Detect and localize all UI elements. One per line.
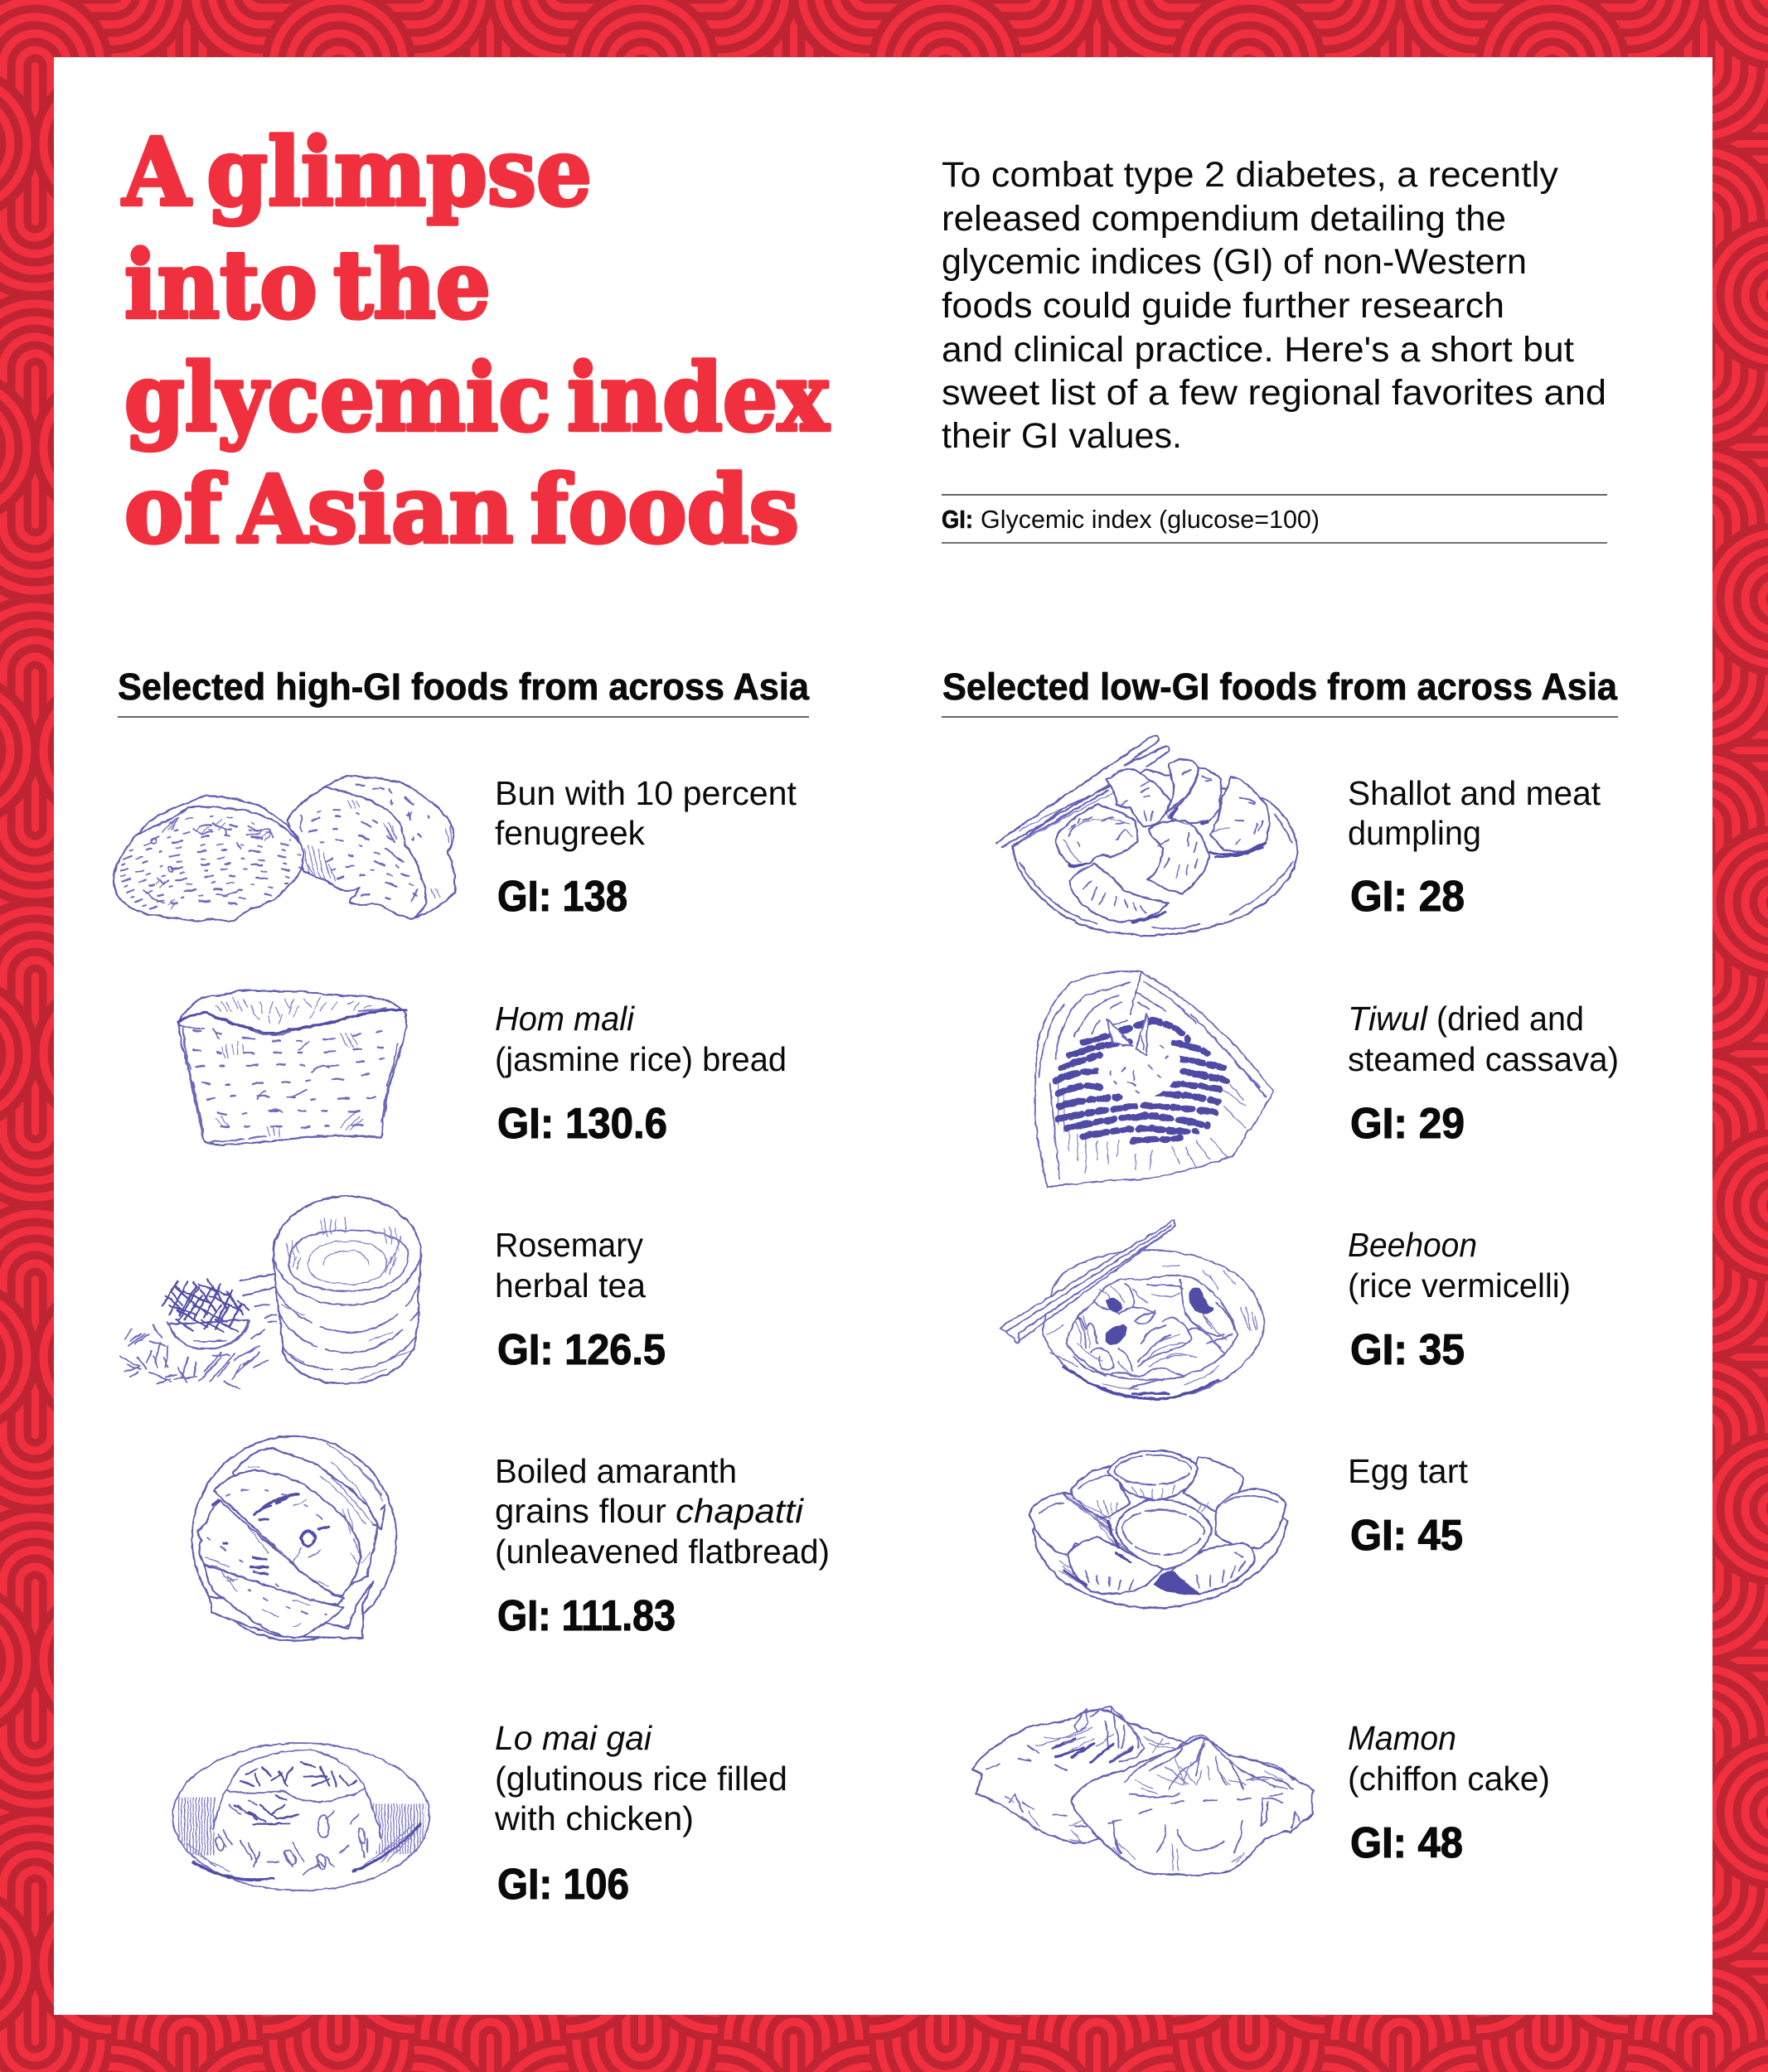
intro paragraph bbox=[942, 155, 1606, 456]
label bbox=[1348, 774, 1601, 921]
label: herbal tea bbox=[495, 1266, 646, 1305]
label bbox=[495, 1226, 666, 1374]
label bbox=[1348, 1452, 1469, 1560]
intro paragraph: and clinical practice. Here's a short but bbox=[942, 330, 1574, 370]
label: GI: 106 bbox=[497, 1861, 629, 1909]
label: fenugreek bbox=[495, 814, 645, 852]
intro paragraph: their GI values. bbox=[942, 416, 1182, 456]
intro paragraph: glycemic indices (GI) of non-Western bbox=[942, 242, 1527, 282]
label: with chicken) bbox=[494, 1799, 694, 1837]
label bbox=[495, 1000, 787, 1148]
label: (chiffon cake) bbox=[1348, 1760, 1550, 1798]
label: Tiwul bbox=[1348, 1000, 1429, 1038]
label: GI: 29 bbox=[1350, 1100, 1465, 1148]
food: beehoon bbox=[1000, 1220, 1571, 1399]
label: GI: 111.83 bbox=[497, 1592, 676, 1640]
label: Beehoon bbox=[1348, 1226, 1477, 1264]
label: Egg tart bbox=[1348, 1452, 1469, 1490]
food: tiwul bbox=[1034, 971, 1619, 1187]
label bbox=[495, 1452, 830, 1640]
label: (glutinous rice filled bbox=[495, 1760, 787, 1798]
label: (dried and bbox=[1436, 1000, 1584, 1038]
label: (jasmine rice) bread bbox=[495, 1040, 787, 1078]
label: GI: 138 bbox=[497, 873, 627, 921]
label: GI: 48 bbox=[1350, 1819, 1463, 1867]
icon: chiffon cakes bbox=[972, 1707, 1314, 1875]
glycemic index note bbox=[942, 495, 1607, 543]
label: dumpling bbox=[1348, 814, 1481, 852]
label: chapatti bbox=[676, 1492, 805, 1530]
label: Bun with 10 percent bbox=[495, 774, 797, 812]
label bbox=[1348, 1226, 1571, 1374]
label: steamed cassava) bbox=[1348, 1040, 1619, 1078]
icon: plate of glutinous rice bbox=[172, 1743, 429, 1890]
intro paragraph: sweet list of a few regional favorites and bbox=[942, 373, 1606, 413]
label: grains flour bbox=[495, 1492, 666, 1530]
glycemic index note: GI: bbox=[942, 505, 973, 534]
icon: plate of chapatti bbox=[192, 1436, 396, 1641]
label: GI: 35 bbox=[1350, 1326, 1465, 1374]
icon: plate of dumplings with chopsticks bbox=[996, 736, 1297, 936]
food: rosemary herbal tea bbox=[120, 1196, 666, 1388]
label: Rosemary bbox=[495, 1226, 643, 1264]
icon: bowl of rice vermicelli with chopsticks bbox=[1000, 1220, 1264, 1399]
title bbox=[122, 119, 830, 564]
label: GI: 126.5 bbox=[497, 1326, 666, 1374]
food: shallot and meat dumpling bbox=[996, 736, 1601, 936]
label: Boiled amaranth bbox=[495, 1452, 737, 1490]
icon: loaf of bread bbox=[178, 990, 406, 1145]
label bbox=[1348, 1000, 1619, 1148]
label bbox=[494, 1719, 787, 1909]
title: into the bbox=[124, 231, 491, 340]
label: Lo mai gai bbox=[495, 1719, 653, 1757]
heading: high-GI foods: Selected high-GI foods from across Asia bbox=[118, 666, 810, 708]
heading: low-GI foods: Selected low-GI foods from across Asia bbox=[942, 666, 1618, 708]
food: egg tart bbox=[1029, 1450, 1469, 1608]
label: GI: 45 bbox=[1350, 1512, 1463, 1560]
title: of Asian foods bbox=[124, 456, 799, 564]
food: mamon bbox=[972, 1707, 1550, 1875]
icon: plate of egg tarts bbox=[1029, 1450, 1287, 1608]
label bbox=[495, 774, 797, 921]
label bbox=[1348, 1719, 1550, 1867]
intro paragraph: To combat type 2 diabetes, a recently bbox=[942, 155, 1559, 195]
food: bun with fenugreek bbox=[114, 774, 797, 922]
label: Shallot and meat bbox=[1348, 774, 1601, 812]
intro paragraph: released compendium detailing the bbox=[942, 199, 1506, 239]
icon: tea cup with rosemary bbox=[120, 1196, 420, 1388]
icon: two bun halves bbox=[114, 777, 455, 922]
glycemic index note: Glycemic index (glucose=100) bbox=[981, 505, 1320, 534]
label: (unleavened flatbread) bbox=[495, 1532, 830, 1571]
label: Mamon bbox=[1348, 1719, 1456, 1757]
label: GI: 130.6 bbox=[497, 1100, 667, 1148]
label: (rice vermicelli) bbox=[1348, 1266, 1571, 1305]
label: Hom mali bbox=[495, 1000, 636, 1038]
food: amaranth chapatti bbox=[192, 1436, 830, 1641]
intro paragraph: foods could guide further research bbox=[942, 286, 1504, 326]
icon: tiwul on a banana leaf bbox=[1034, 971, 1274, 1187]
label: GI: 28 bbox=[1350, 873, 1465, 921]
food: lo mai gai bbox=[172, 1719, 787, 1909]
title: glycemic index bbox=[124, 344, 830, 453]
food: hom mali bread bbox=[178, 990, 787, 1148]
title: A glimpse bbox=[122, 119, 592, 227]
